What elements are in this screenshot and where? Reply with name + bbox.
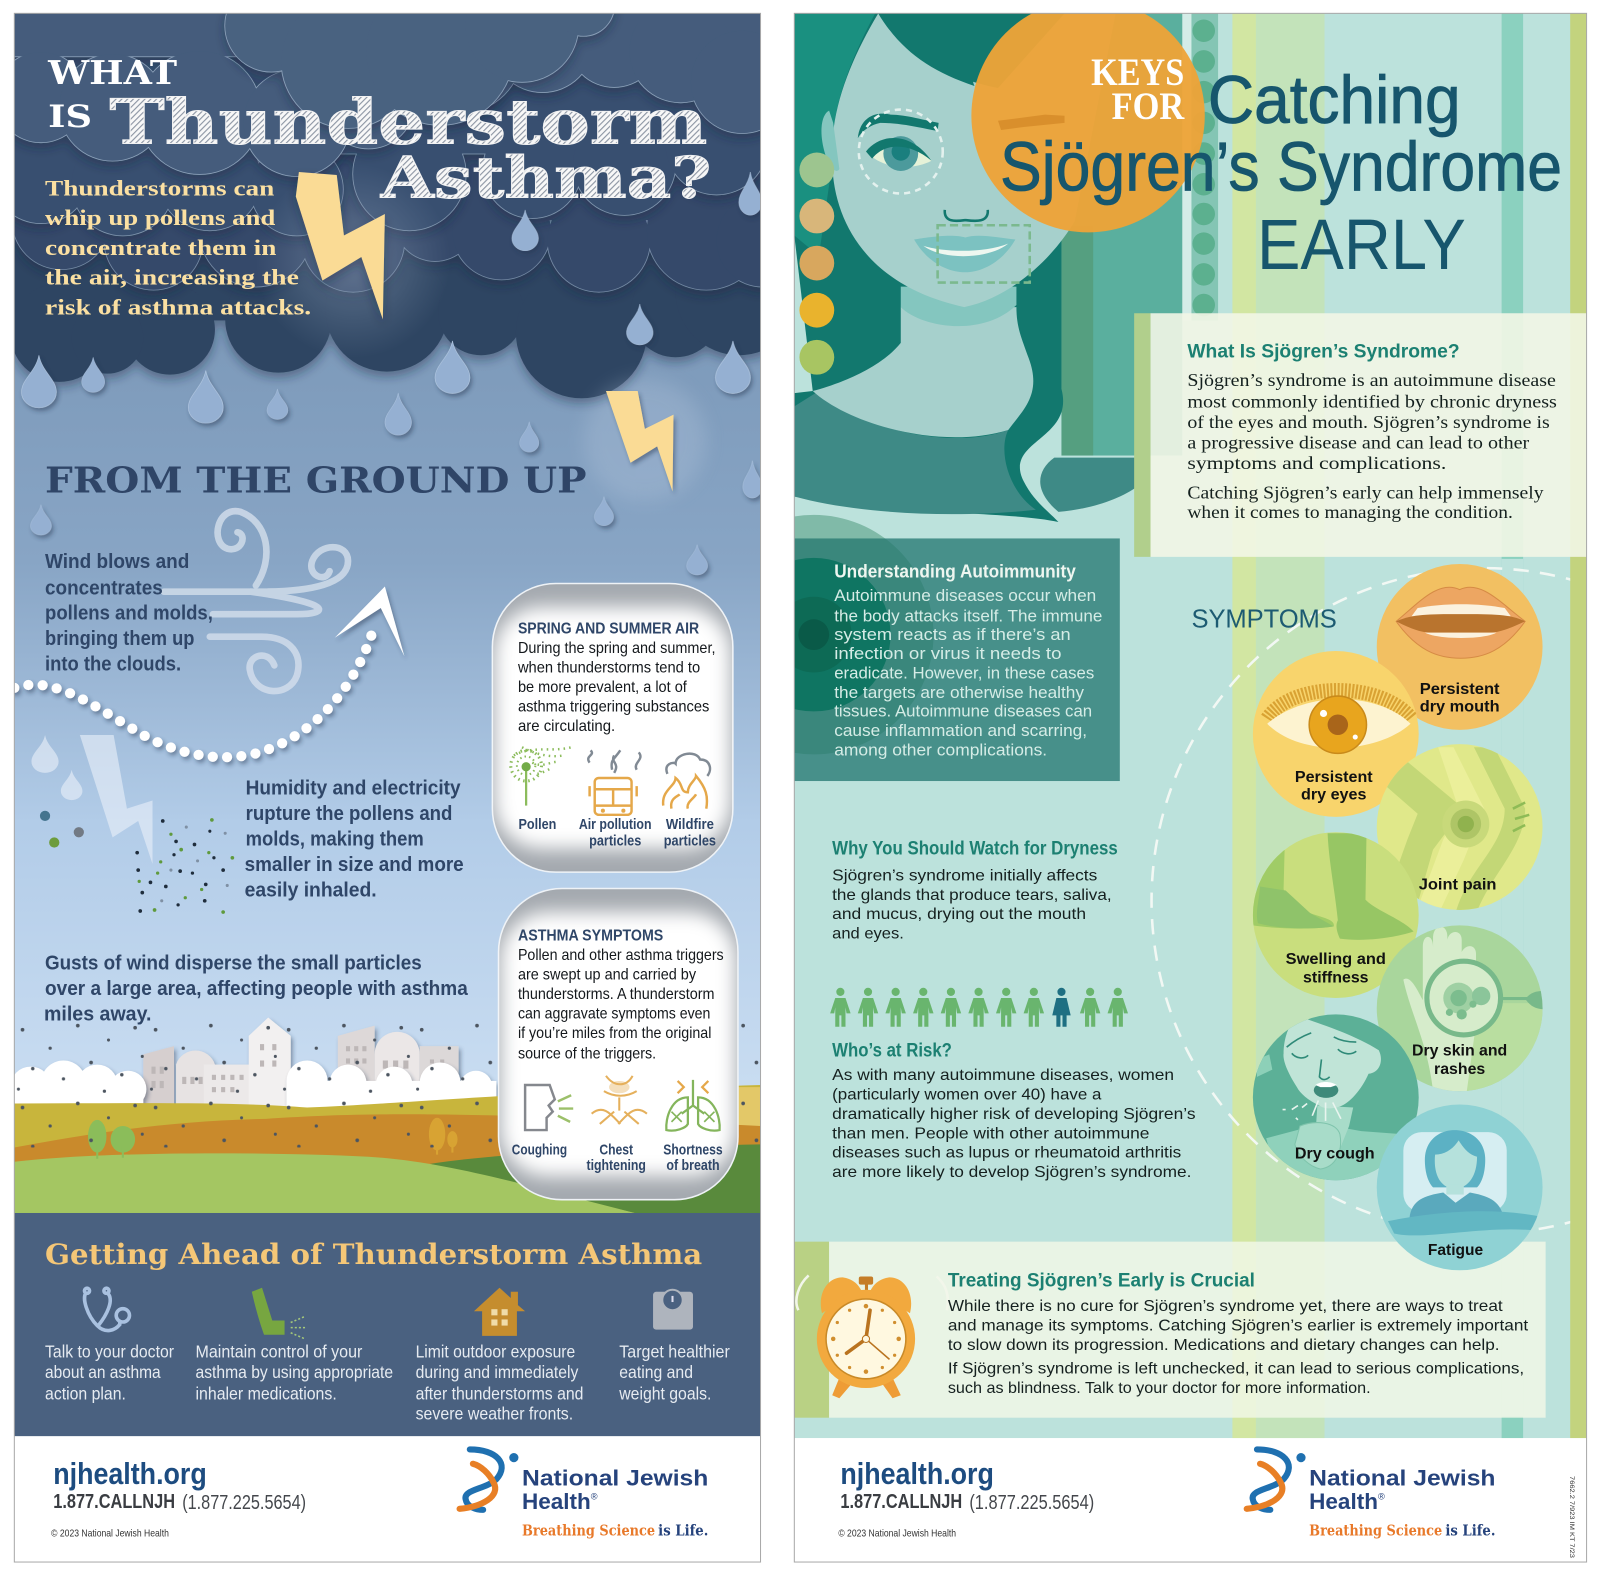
icon: house <box>474 1288 525 1336</box>
action texts <box>45 1341 730 1424</box>
panel: understanding autoimmunity: the targets are otherwise healthy <box>834 684 1085 702</box>
action texts: Limit outdoor exposure <box>416 1341 575 1361</box>
dots stripe <box>1192 19 1215 316</box>
symptom: joint pain: Joint pain <box>1419 877 1496 894</box>
title: KEYS <box>1091 51 1184 94</box>
city skyline <box>14 1018 498 1108</box>
landscape: hills <box>14 1085 761 1213</box>
card: asthma symptoms: are swept up and carried by <box>518 967 696 984</box>
text: why watch for dryness: and eyes. <box>832 926 904 943</box>
text: gusts of wind: Gusts of wind disperse the small particles <box>45 951 422 974</box>
text: who's at risk: As with many autoimmune diseases, women <box>832 1067 1174 1084</box>
intro text: concentrate them in <box>45 235 277 260</box>
panel: treating early: such as blindness. Talk to your doctor for more information. <box>948 1380 1371 1397</box>
footer left: contact: © 2023 National Jewish Health <box>51 1528 169 1539</box>
panel: thunderstorm asthma <box>0 0 809 1562</box>
card: spring and summer air: are circulating. <box>518 718 615 735</box>
action texts: eating and <box>619 1362 693 1382</box>
intro text: the air, increasing the <box>45 265 299 290</box>
symptom: swelling and stiffness: Swelling and <box>1286 951 1386 968</box>
text: gusts of wind: miles away. <box>44 1003 151 1026</box>
panel: Sjögren's syndrome <box>794 12 1588 1562</box>
text: gusts of wind: over a large area, affecting people with asthma <box>45 977 468 1000</box>
logo left: is Life. <box>658 1521 708 1539</box>
panel: understanding autoimmunity: cause inflammation and scarring, <box>834 722 1087 740</box>
card: spring and summer air: asthma triggering substances <box>518 698 709 715</box>
panel: what is Sjögren's: Sjögren’s syndrome is an autoimmune disease <box>1187 370 1556 390</box>
logo left: ® <box>591 1492 598 1502</box>
icon labels: Shortness <box>663 1143 723 1159</box>
intro text <box>45 176 311 319</box>
symptom: dry mouth: Persistent <box>1420 681 1500 698</box>
landscape: trees <box>88 1118 458 1159</box>
icon labels: particles <box>589 834 641 850</box>
panel: understanding autoimmunity: eradicate. However, in these cases <box>834 665 1094 683</box>
text: wind blows: bringing them up <box>45 627 194 650</box>
panel: treating early: While there is no cure for Sjögren’s syndrome yet, there are ways to treat <box>948 1298 1503 1315</box>
footer left: contact <box>51 1456 306 1539</box>
storm clouds <box>0 0 809 398</box>
symptom: dry mouth: dry mouth <box>1420 698 1500 715</box>
icon labels <box>512 1143 723 1174</box>
panel: understanding autoimmunity: Understanding Autoimmunity <box>834 560 1077 581</box>
action texts: after thunderstorms and <box>416 1383 583 1403</box>
icon: inhaler <box>252 1288 307 1339</box>
earrings <box>799 153 834 375</box>
text: why watch for dryness <box>832 838 1118 943</box>
icon: pollen dandelion <box>511 747 571 806</box>
icon labels: Pollen <box>518 817 556 833</box>
text: humidity and electricity: Humidity and electricity <box>246 776 461 799</box>
ruptured particles <box>40 811 234 914</box>
title <box>1002 59 1560 269</box>
panel: what is Sjögren's: when it comes to managing the condition. <box>1187 502 1513 522</box>
action texts: weight goals. <box>618 1383 711 1403</box>
symptom: swelling and stiffness: stiffness <box>1303 970 1369 987</box>
symptom: dry mouth <box>1377 564 1543 730</box>
icon labels: Wildfire <box>666 817 714 833</box>
text: wind blows: into the clouds. <box>45 652 181 675</box>
symptom: swelling and stiffness <box>1253 832 1419 998</box>
title: FOR <box>1112 85 1185 128</box>
card: asthma symptoms <box>498 889 738 1200</box>
face features <box>858 110 1030 283</box>
text: wind blows: concentrates <box>45 577 163 600</box>
card: spring and summer air: when thunderstorms tend to <box>517 660 700 677</box>
icon: chest tightening <box>592 1076 647 1124</box>
card: spring and summer air: be more prevalent, a lot of <box>518 679 687 696</box>
icon labels: Chest <box>599 1143 633 1159</box>
panel: what is Sjögren's: Catching Sjögren’s early can help immensely <box>1187 483 1544 503</box>
icon labels <box>518 817 716 850</box>
panel: what is Sjögren's: What Is Sjögren’s Syndrome? <box>1187 340 1460 362</box>
panel: treating early: to slow down its progression. Medications and dietary changes can help. <box>948 1337 1500 1354</box>
heading: symptoms: SYMPTOMS <box>1191 605 1337 633</box>
heading: from the ground up: FROM THE GROUND UP <box>45 459 587 501</box>
panel: understanding autoimmunity: infection or virus it needs to <box>834 645 1061 663</box>
icon labels: tightening <box>587 1158 646 1174</box>
icon: weight scale <box>653 1290 693 1330</box>
symptom: fatigue: Fatigue <box>1428 1242 1483 1259</box>
text: who's at risk: diseases such as lupus or rheumatoid arthritis <box>832 1145 1181 1162</box>
panel: what is Sjögren's: most commonly identified by chronic dryness <box>1187 391 1557 411</box>
symptom: dry skin and rashes: rashes <box>1434 1061 1485 1078</box>
icon: air pollution bus <box>588 750 640 815</box>
icon labels: Coughing <box>512 1143 567 1159</box>
card: spring and summer air <box>492 583 733 872</box>
panel: what is Sjögren's: a progressive disease and can lead to other <box>1187 432 1529 452</box>
text: humidity and electricity: rupture the pollens and <box>246 802 452 825</box>
action texts: Talk to your doctor <box>45 1341 174 1361</box>
logo right: Health <box>1309 1489 1378 1514</box>
text: who's at risk: Who’s at Risk? <box>832 1039 952 1061</box>
lightning bolt large <box>296 172 385 319</box>
text: who's at risk: than men. People with other autoimmune <box>832 1125 1150 1142</box>
icon labels: Air pollution <box>579 817 652 833</box>
lightning bolt small <box>583 379 706 502</box>
action texts: Maintain control of your <box>196 1341 362 1361</box>
symptom: dry cough <box>1253 1014 1419 1187</box>
rising pollen dots and arrow <box>14 587 404 757</box>
orange circle <box>971 0 1205 232</box>
icon labels: particles <box>664 834 716 850</box>
text: wind blows: Wind blows and <box>45 550 189 573</box>
card: asthma symptoms: thunderstorms. A thunderstorm <box>518 986 714 1003</box>
text: humidity and electricity: smaller in size and more <box>245 853 464 876</box>
footer left: contact: 1.877.CALLNJH <box>53 1490 175 1513</box>
card: asthma symptoms: Pollen and other asthma triggers <box>518 947 724 964</box>
footer right: contact: © 2023 National Jewish Health <box>838 1528 956 1539</box>
symptom: dry eyes: Persistent <box>1295 769 1373 786</box>
panel: getting ahead <box>14 1213 761 1436</box>
text: who's at risk: dramatically higher risk of developing Sjögren’s <box>832 1106 1196 1123</box>
text: wind blows <box>45 550 213 675</box>
panel: what is Sjögren's: of the eyes and mouth. Sjögren’s syndrome is <box>1187 412 1550 432</box>
logo right: Breathing Science <box>1309 1521 1442 1539</box>
woman illustration <box>794 13 1182 522</box>
logo right: ® <box>1378 1492 1385 1502</box>
heading: Getting Ahead of Thunderstorm Asthma <box>45 1238 702 1271</box>
footer left: contact: njhealth.org <box>53 1456 207 1491</box>
action texts: Target healthier <box>619 1341 730 1361</box>
action texts: asthma by using appropriate <box>196 1362 393 1382</box>
footer right: contact: njhealth.org <box>840 1456 994 1491</box>
intro text: Thunderstorms can <box>45 176 275 201</box>
symptom: dry eyes: dry eyes <box>1301 786 1367 803</box>
sky background <box>14 320 760 1104</box>
logo left: Health <box>522 1489 591 1514</box>
icon: alarm clock <box>796 1275 948 1398</box>
card: spring and summer air: SPRING AND SUMMER AIR <box>518 621 700 638</box>
panel: treating early: Treating Sjögren’s Early is Crucial <box>948 1270 1255 1292</box>
action texts: during and immediately <box>416 1362 578 1382</box>
text: humidity and electricity: easily inhaled. <box>245 879 377 902</box>
drifting particles <box>14 1020 761 1147</box>
symptom: fatigue <box>1377 1104 1543 1270</box>
action texts: action plan. <box>45 1383 126 1403</box>
card: asthma symptoms: ASTHMA SYMPTOMS <box>518 928 663 945</box>
icon labels: of breath <box>666 1158 720 1174</box>
card: asthma symptoms: can aggravate symptoms even <box>518 1006 710 1023</box>
symptom: dry skin and rashes <box>1377 925 1550 1095</box>
text: who's at risk <box>832 1039 1196 1181</box>
title: Asthma? <box>380 144 711 212</box>
intro text: whip up pollens and <box>45 205 276 230</box>
text: gusts of wind <box>44 951 468 1026</box>
pale lightning and droplets <box>31 735 153 864</box>
title: WHAT <box>47 53 178 92</box>
text: why watch for dryness: the glands that produce tears, saliva, <box>832 887 1112 904</box>
wind swirls <box>164 511 348 691</box>
raindrops <box>21 172 762 575</box>
card: asthma symptoms: if you’re miles from the original <box>518 1025 711 1042</box>
panel: what is Sjögren's: symptoms and complications. <box>1187 453 1446 473</box>
text: why watch for dryness: Why You Should Watch for Dryness <box>832 838 1118 860</box>
logo right <box>1247 1449 1495 1539</box>
text: humidity and electricity: molds, making them <box>246 828 424 851</box>
intro text: risk of asthma attacks. <box>45 294 311 319</box>
symptom: dry eyes <box>1253 651 1419 817</box>
icon: lungs <box>666 1080 720 1131</box>
logo left <box>460 1449 708 1539</box>
title: Catching <box>1208 63 1461 138</box>
panel: understanding autoimmunity: the body attacks itself. The immune <box>834 607 1102 625</box>
symptom: dry cough: Dry cough <box>1295 1146 1375 1163</box>
action texts: inhaler medications. <box>196 1383 337 1403</box>
card: asthma symptoms: source of the triggers. <box>518 1045 656 1062</box>
logo right: National Jewish <box>1309 1465 1495 1490</box>
title: IS <box>48 99 92 135</box>
text: humidity and electricity <box>245 776 464 902</box>
dashed circle connector <box>1152 568 1605 1233</box>
symptom: dry skin and rashes: Dry skin and <box>1412 1042 1507 1059</box>
footer right: contact: (1.877.225.5654) <box>969 1491 1094 1514</box>
action texts: severe weather fronts. <box>416 1404 573 1424</box>
panel: treating early: If Sjögren’s syndrome is left unchecked, it can lead to serious complications, <box>948 1361 1524 1378</box>
card: spring and summer air: During the spring and summer, <box>518 640 715 657</box>
panel: what is Sjögren's <box>1134 313 1587 557</box>
text: wind blows: pollens and molds, <box>45 601 213 624</box>
text: why watch for dryness: Sjögren’s syndrome initially affects <box>832 867 1097 884</box>
footer right: contact: 1.877.CALLNJH <box>840 1490 962 1513</box>
title <box>47 53 711 212</box>
action texts: about an asthma <box>45 1362 161 1382</box>
icon: coughing <box>525 1085 573 1130</box>
panel: understanding autoimmunity: system reacts as if there’s an <box>834 626 1071 644</box>
title: EARLY <box>1257 205 1466 285</box>
footer right: contact <box>838 1456 1094 1539</box>
title: Thunderstorm <box>110 86 707 158</box>
background stripes <box>794 13 1587 1438</box>
panel: understanding autoimmunity <box>794 514 1120 781</box>
icon: stethoscope <box>84 1288 129 1331</box>
footer left: contact: (1.877.225.5654) <box>182 1491 306 1514</box>
pictogram: people <box>830 988 1128 1027</box>
icon: wildfire <box>663 754 710 809</box>
print code: 7662.2 7/923 IM KT 7/23 <box>1568 1476 1575 1558</box>
panel: treating early: and manage its symptoms. Catching Sjögren’s earlier is extremely important <box>948 1318 1529 1335</box>
symptom: joint pain <box>1377 744 1543 921</box>
panel: understanding autoimmunity: tissues. Autoimmune diseases can <box>834 703 1092 721</box>
panel: treating early <box>794 1242 1546 1418</box>
logo left: National Jewish <box>522 1465 708 1490</box>
text: why watch for dryness: and mucus, drying out the mouth <box>832 906 1086 923</box>
text: who's at risk: (particularly women over 40) have a <box>832 1086 1102 1103</box>
text: who's at risk: are more likely to develop Sjögren’s syndrome. <box>832 1164 1191 1181</box>
panel: understanding autoimmunity: Autoimmune diseases occur when <box>834 587 1096 605</box>
logo right: is Life. <box>1445 1521 1495 1539</box>
logo left: Breathing Science <box>522 1521 655 1539</box>
panel: understanding autoimmunity: among other complications. <box>834 741 1047 759</box>
